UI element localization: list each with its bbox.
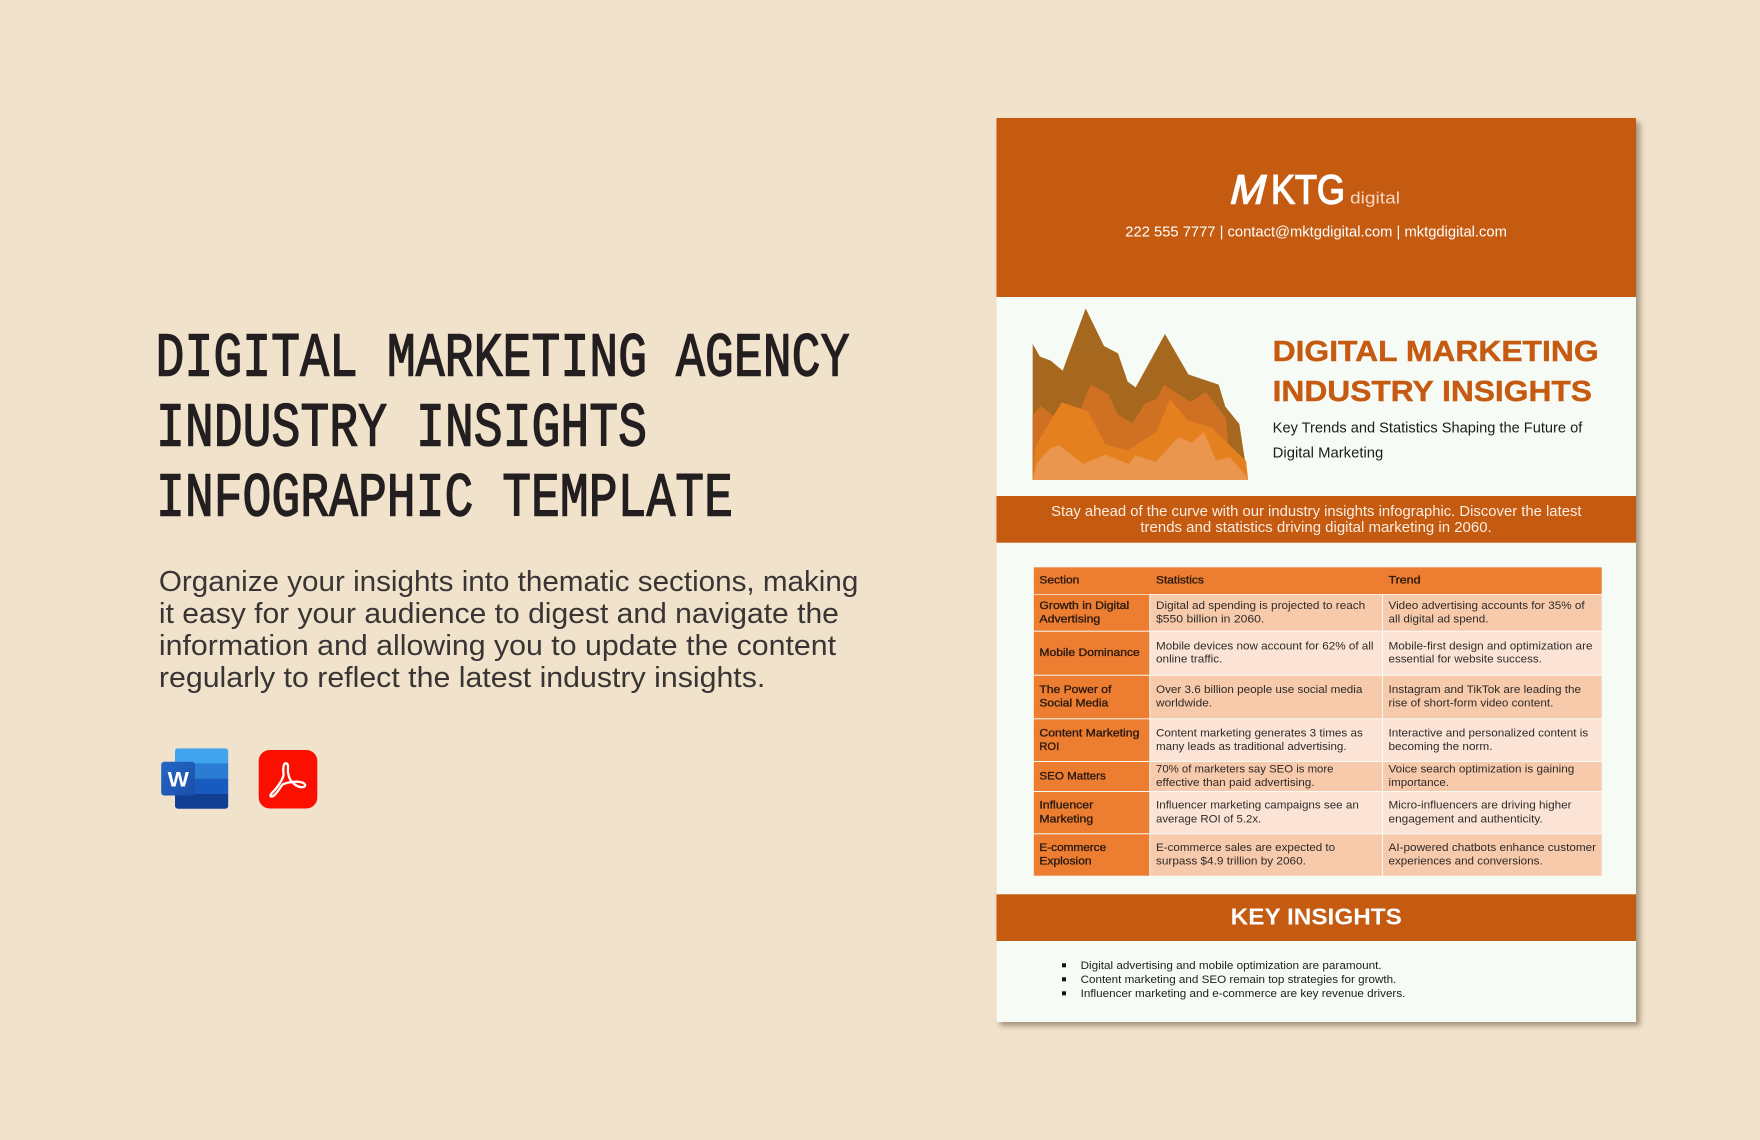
row: content marketing roi: Interactive and personalized content is bbox=[1388, 727, 1588, 739]
header band bbox=[996, 118, 1636, 297]
row: growth in digital advertising: $550 billion in 2060. bbox=[1156, 613, 1264, 625]
row: content marketing roi: ROI bbox=[1039, 741, 1059, 753]
row: e-commerce explosion: surpass $4.9 trillion by 2060. bbox=[1156, 856, 1306, 868]
row: mobile dominance: essential for website success. bbox=[1388, 654, 1542, 666]
row: mobile dominance: Mobile-first design and optimization are bbox=[1388, 640, 1592, 652]
logo bbox=[1226, 166, 1400, 212]
table header row: Trend bbox=[1388, 574, 1420, 586]
document subtitle: Key Trends and Statistics Shaping the Future of bbox=[1273, 420, 1583, 436]
row: mobile dominance: Mobile devices now account for 62% of all bbox=[1156, 640, 1374, 652]
row: influencer marketing: Micro-influencers are driving higher bbox=[1388, 800, 1572, 812]
description text: regularly to reflect the latest industry insights. bbox=[159, 662, 765, 694]
description text bbox=[159, 566, 858, 694]
document heading: DIGITAL MARKETING bbox=[1273, 336, 1599, 368]
intro banner: trends and statistics driving digital marketing in 2060. bbox=[1140, 520, 1492, 536]
title: INDUSTRY INSIGHTS bbox=[156, 394, 647, 465]
document heading bbox=[1273, 336, 1599, 408]
statistics table bbox=[1034, 567, 1602, 876]
key insights heading band: KEY INSIGHTS bbox=[1231, 903, 1402, 929]
row: influencer marketing: average ROI of 5.2x. bbox=[1156, 813, 1261, 825]
panel: document preview bbox=[996, 118, 1640, 1026]
row: seo matters: importance. bbox=[1388, 777, 1449, 789]
contact line: 222 555 7777 | contact@mktgdigital.com | mktgdigital.com bbox=[1125, 225, 1507, 241]
row: mobile dominance bbox=[1034, 632, 1602, 675]
row: influencer marketing bbox=[1034, 792, 1602, 833]
row: e-commerce explosion bbox=[1034, 834, 1602, 876]
row: growth in digital advertising bbox=[1034, 595, 1602, 631]
key insights bullet list: Content marketing and SEO remain top strategies for growth. bbox=[1081, 974, 1396, 986]
row: growth in digital advertising: Digital ad spending is projected to reach bbox=[1156, 600, 1365, 612]
table header row: Section bbox=[1039, 574, 1079, 586]
logo: KTG bbox=[1271, 166, 1345, 212]
row: growth in digital advertising: all digital ad spend. bbox=[1388, 613, 1488, 625]
row: e-commerce explosion: experiences and conversions. bbox=[1388, 856, 1543, 868]
table header row bbox=[1034, 567, 1602, 594]
row: e-commerce explosion: E-commerce bbox=[1039, 842, 1106, 854]
row: power of social media bbox=[1034, 676, 1602, 718]
row: seo matters: SEO Matters bbox=[1039, 770, 1106, 782]
row: content marketing roi: Content Marketing bbox=[1039, 727, 1139, 739]
icon: pdf document bbox=[259, 750, 317, 808]
row: power of social media: Over 3.6 billion people use social media bbox=[1156, 684, 1363, 696]
row: e-commerce explosion: Explosion bbox=[1039, 856, 1092, 868]
icon: word document bbox=[161, 748, 228, 809]
description text: information and allowing you to update the content bbox=[159, 630, 836, 662]
row: influencer marketing: Marketing bbox=[1039, 813, 1093, 825]
row: growth in digital advertising: Advertising bbox=[1039, 613, 1100, 625]
document heading: INDUSTRY INSIGHTS bbox=[1273, 376, 1592, 408]
row: power of social media: Social Media bbox=[1039, 698, 1109, 710]
row: seo matters: 70% of marketers say SEO is more bbox=[1156, 763, 1334, 775]
row: seo matters: Voice search optimization is gaining bbox=[1388, 763, 1574, 775]
intro banner: Stay ahead of the curve with our industry insights infographic. Discover the latest bbox=[1051, 504, 1582, 520]
document subtitle bbox=[1273, 420, 1583, 461]
row: seo matters: effective than paid advertising. bbox=[1156, 777, 1315, 789]
document subtitle: Digital Marketing bbox=[1273, 445, 1383, 461]
key insights heading band bbox=[996, 894, 1636, 941]
row: content marketing roi: Content marketing generates 3 times as bbox=[1156, 727, 1363, 739]
table header row: Statistics bbox=[1156, 574, 1204, 586]
row: influencer marketing: Influencer bbox=[1039, 800, 1093, 812]
row: growth in digital advertising: Video advertising accounts for 35% of bbox=[1388, 600, 1585, 612]
row: power of social media: rise of short-form video content. bbox=[1388, 698, 1553, 710]
description text: Organize your insights into thematic sections, making bbox=[159, 566, 858, 598]
row: content marketing roi: many leads as traditional advertising. bbox=[1156, 741, 1347, 753]
key insights bullet list: Digital advertising and mobile optimization are paramount. bbox=[1081, 960, 1382, 972]
description text: it easy for your audience to digest and navigate the bbox=[159, 598, 839, 630]
icon: word document: W bbox=[168, 769, 189, 792]
row: mobile dominance: online traffic. bbox=[1156, 654, 1222, 666]
row: seo matters bbox=[1034, 762, 1602, 791]
key insights bullet list bbox=[1062, 960, 1405, 1000]
title: INFOGRAPHIC TEMPLATE bbox=[156, 464, 733, 535]
row: e-commerce explosion: E-commerce sales are expected to bbox=[1156, 842, 1335, 854]
row: power of social media: Instagram and TikTok are leading the bbox=[1388, 684, 1581, 696]
intro banner bbox=[996, 496, 1636, 543]
title: DIGITAL MARKETING AGENCY bbox=[156, 324, 850, 395]
row: e-commerce explosion: AI-powered chatbots enhance customer bbox=[1388, 842, 1596, 854]
row: growth in digital advertising: Growth in Digital bbox=[1039, 600, 1129, 612]
row: content marketing roi: becoming the norm. bbox=[1388, 741, 1492, 753]
area chart bbox=[1033, 308, 1248, 480]
row: mobile dominance: Mobile Dominance bbox=[1039, 647, 1140, 659]
row: power of social media: The Power of bbox=[1039, 684, 1112, 696]
logo: digital bbox=[1350, 188, 1400, 207]
logo: M bbox=[1226, 166, 1272, 212]
row: power of social media: worldwide. bbox=[1155, 698, 1212, 710]
row: content marketing roi bbox=[1034, 719, 1602, 761]
title bbox=[156, 324, 850, 535]
row: influencer marketing: Influencer marketing campaigns see an bbox=[1156, 800, 1359, 812]
row: influencer marketing: engagement and authenticity. bbox=[1388, 813, 1543, 825]
key insights bullet list: Influencer marketing and e-commerce are key revenue drivers. bbox=[1081, 988, 1405, 1000]
